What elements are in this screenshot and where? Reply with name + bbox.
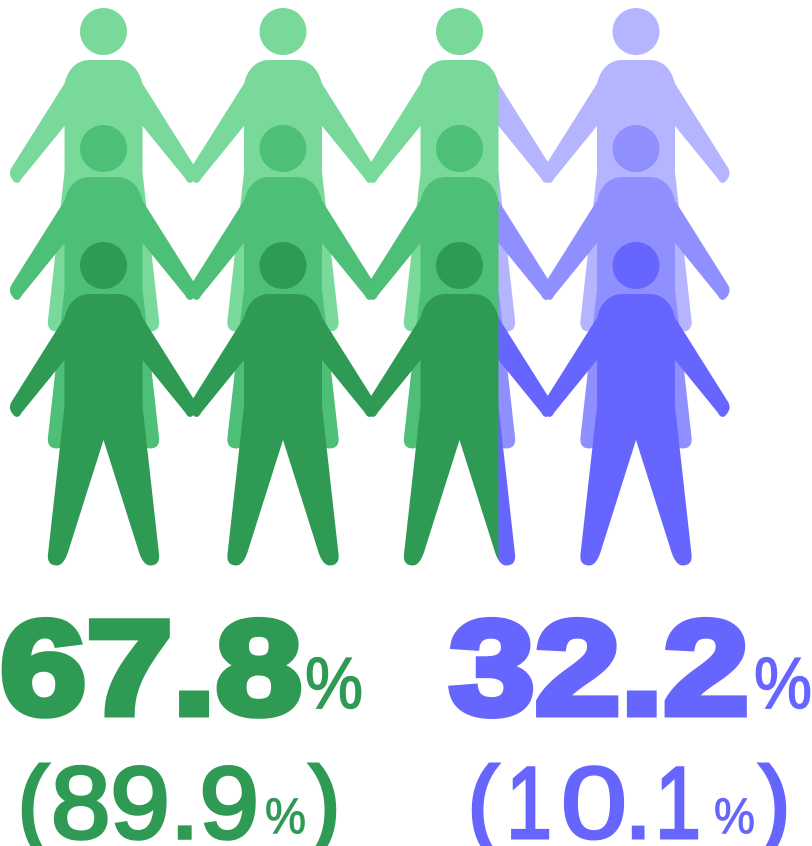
people row 1 (lightest) [10, 8, 730, 332]
digits 10.1 [506, 746, 701, 846]
green secondary figure (89.9%): % [265, 788, 306, 844]
green secondary figure (89.9%) [18, 746, 340, 846]
purple secondary figure (10.1%) [468, 746, 790, 846]
purple main figure 32.2%: 32.2 [449, 594, 749, 743]
people row 2 (medium) [10, 125, 730, 448]
pictogram: rows of people holding hands [10, 8, 730, 566]
green main figure 67.8%: % [305, 644, 363, 724]
green main figure 67.8%: 67.8 [0, 594, 302, 743]
people row 3 (darkest) [10, 242, 730, 566]
purple secondary figure (10.1%): % [714, 788, 755, 844]
